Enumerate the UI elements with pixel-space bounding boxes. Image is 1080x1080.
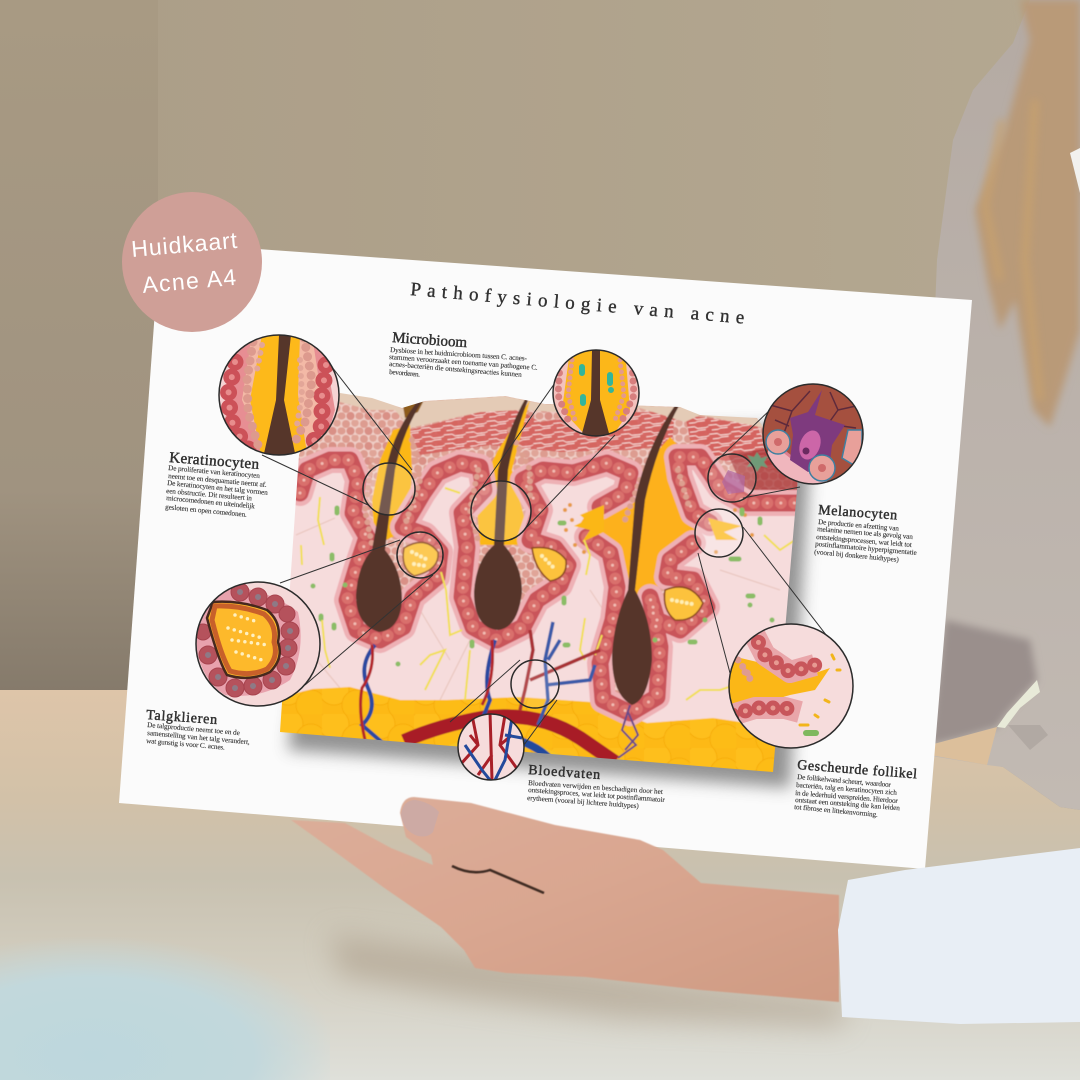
label: Gescheurde follikel: Gescheurde follikel — [797, 758, 918, 782]
label: Gescheurde follikel: ontstaat een ontsteking die kan leiden — [795, 796, 901, 812]
label: Keratinocyten: een obstructie. Dit resulteert in — [166, 487, 253, 503]
label: Keratinocyten: neemt toe en desquamatie neemt af. — [168, 472, 267, 489]
magnifier: melanocytes — [762, 383, 864, 485]
label: Melanocyten: De productie en afzetting van — [818, 518, 900, 533]
sleeve — [838, 848, 1080, 1024]
blood vessels: main arc — [404, 716, 615, 762]
label: Talgklieren: De talgproductie neemt toe en de — [147, 721, 240, 737]
melanocyte in small circle — [722, 470, 745, 494]
label: Microbioom: stammen veroorzaakt een toename van pathogene C. — [389, 353, 538, 372]
reddish upper epidermis — [410, 410, 675, 455]
magnifier: microbiome — [550, 348, 642, 440]
label: Keratinocyten: Keratinocyten — [169, 450, 260, 473]
magnifier: keratinocytes — [218, 334, 340, 456]
label: Microbioom: acnes-bacteriën die ontstekingsreacties kunnen — [389, 360, 522, 379]
dermal bacteria — [313, 508, 772, 664]
sebaceous glands — [403, 542, 703, 620]
follicle plug — [402, 402, 424, 418]
dermis fibres — [296, 518, 780, 700]
label: Microbioom: bevorderen. — [389, 368, 421, 379]
label: Keratinocyten: gesloten en open comedonen. — [165, 503, 247, 519]
label: Melanocyten: melanine nemen toe als gevolg van — [817, 525, 914, 541]
magnifier: ruptured follicle — [725, 620, 857, 752]
label: Bloedvaten: Bloedvaten verwijden en beschadigen door het — [528, 779, 663, 796]
hair follicle 1 — [355, 402, 422, 632]
label: Keratinocyten: De keratinocyten en het talg vormen — [167, 479, 269, 497]
label: Melanocyten: ontstekingsprocessen, wat leidt tot — [816, 533, 912, 549]
label: Gescheurde follikel — [794, 758, 918, 819]
label: Microbioom: Microbioom — [392, 330, 468, 351]
hair follicle 3 — [611, 406, 679, 706]
sebum in follicles — [372, 400, 530, 545]
label: Bloedvaten — [527, 763, 666, 810]
label: Keratinocyten: De proliferatie van keratinocyten — [168, 464, 261, 480]
magnifier: blood vessels — [457, 713, 525, 781]
label: Melanocyten: Melanocyten — [818, 503, 898, 524]
stratum corneum — [339, 393, 763, 428]
label: Bloedvaten: Bloedvaten — [528, 763, 601, 783]
label: Microbioom — [389, 330, 538, 379]
title: Pathofysiologie van acne — [410, 279, 745, 329]
label: Bloedvaten: ontstekingsproces, wat leidt tot postinflammatoir — [528, 786, 666, 804]
label: Talgklieren: Talgklieren — [146, 708, 218, 728]
connector lines — [262, 367, 830, 768]
cell chains — [300, 457, 797, 713]
thumb nail — [401, 800, 439, 836]
label: Talgklieren: wat gunstig is voor C. acnes. — [146, 737, 225, 752]
label: Gescheurde follikel: bacteriën, talg en keratinocyten zich — [796, 781, 898, 797]
label: Microbioom: Dysbiose in het huidmicrobioom tussen C. acnes- — [390, 346, 528, 363]
blood vessels: capillaries — [362, 640, 495, 745]
label: Gescheurde follikel: tot fibrose en littekenvorming. — [794, 803, 878, 819]
badge: Huidkaart Acne A4 — [122, 192, 262, 332]
keratinocyte plugs along canals — [365, 430, 690, 545]
label: Talgklieren: samenstelling van het talg verandert, — [147, 729, 250, 746]
subcutaneous fat — [280, 686, 776, 772]
label: Melanocyten — [814, 503, 917, 564]
label: Talgklieren — [146, 708, 250, 752]
epidermis — [298, 396, 798, 694]
label: Gescheurde follikel: in de lederhuid verspreiden. Hierdoor — [795, 789, 899, 805]
magnifier: sebaceous gland — [195, 581, 321, 707]
yellow filaments — [301, 488, 795, 700]
person: coat and hair — [925, 0, 1080, 810]
poster sheet — [119, 242, 972, 869]
green cell star — [747, 452, 768, 472]
label: Melanocyten: (vooral bij donkere huidtypes) — [814, 548, 900, 564]
rupture splash — [574, 505, 742, 542]
badge: Huidkaart Acne A4: Huidkaart — [130, 227, 239, 262]
label: Keratinocyten — [165, 450, 269, 519]
label: Melanocyten: postinflammatoire hyperpigmentatie — [815, 540, 917, 557]
hand holding poster — [291, 797, 839, 1002]
label: Gescheurde follikel: De follikelwand scheurt, waardoor — [797, 773, 892, 789]
hair follicle 2 — [474, 400, 528, 631]
skin cross-section illustration — [270, 380, 810, 780]
small focus circles — [363, 454, 756, 708]
label: Bloedvaten: erytheem (vooral bij lichtere huidtypes) — [527, 794, 640, 810]
badge: Huidkaart Acne A4: Acne A4 — [141, 264, 237, 298]
illustration shadow — [288, 425, 812, 788]
dermis — [290, 470, 798, 724]
label: Keratinocyten: microcomedonen en uiteindelijk — [166, 494, 256, 511]
